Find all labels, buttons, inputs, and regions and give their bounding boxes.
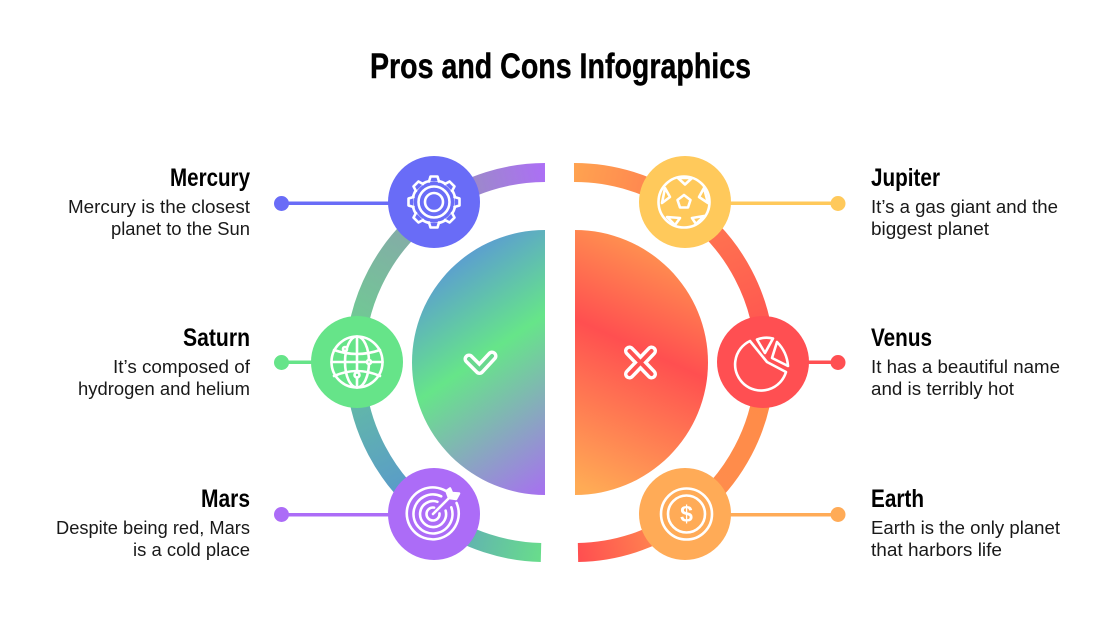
connector: Mercury [274, 196, 391, 211]
text: Venus [871, 324, 1060, 399]
text: Mars: is a cold place [133, 540, 250, 560]
icon circle: Earth coin [639, 468, 731, 560]
text: Venus: and is terribly hot [871, 379, 1014, 399]
icon circle: Mercury gear [388, 156, 480, 248]
text: Saturn: hydrogen and helium [78, 379, 250, 399]
text: Earth [871, 485, 1060, 560]
text: Mars: Mars [201, 485, 250, 513]
text: Jupiter [871, 164, 1058, 239]
text: Jupiter: It’s a gas giant and the [871, 197, 1058, 217]
icon circle: Venus pie chart [717, 316, 809, 408]
text: Mars [56, 485, 250, 560]
icon: cross [630, 351, 652, 374]
text: Saturn: It’s composed of [113, 357, 251, 377]
connector: Jupiter [725, 196, 846, 211]
text: Mercury: planet to the Sun [111, 219, 250, 239]
connector: Earth [725, 507, 846, 522]
text: Earth: Earth is the only planet [871, 518, 1060, 538]
text: Saturn: Saturn [183, 324, 250, 352]
icon circle: Earth coin: $ [680, 501, 693, 527]
connector: Mars [274, 507, 391, 522]
text: Saturn [78, 324, 251, 399]
text: Venus: Venus [871, 324, 932, 352]
icon circle: Saturn globe [311, 316, 403, 408]
icon circle: Mars target [388, 468, 480, 560]
text: Earth: that harbors life [871, 540, 1002, 560]
text: Jupiter: biggest planet [871, 219, 989, 239]
text: Mercury: Mercury [170, 164, 250, 192]
cons outer arc [574, 172, 765, 552]
connector: Venus [800, 355, 846, 370]
text: Mars: Despite being red, Mars [56, 518, 250, 538]
cons half circle [575, 230, 708, 495]
pros half circle [412, 230, 545, 495]
text: Venus: It has a beautiful name [871, 357, 1060, 377]
text: Earth: Earth [871, 485, 924, 513]
pros outer arc [355, 172, 545, 552]
text: Jupiter: Jupiter [871, 164, 940, 192]
title: Pros and Cons Infographics [370, 47, 751, 86]
icon: check [469, 356, 492, 370]
icon circle: Jupiter ball [639, 156, 731, 248]
text: Mercury: Mercury is the closest [68, 197, 250, 217]
connector: Saturn [274, 355, 321, 370]
text: Mercury [68, 164, 250, 239]
